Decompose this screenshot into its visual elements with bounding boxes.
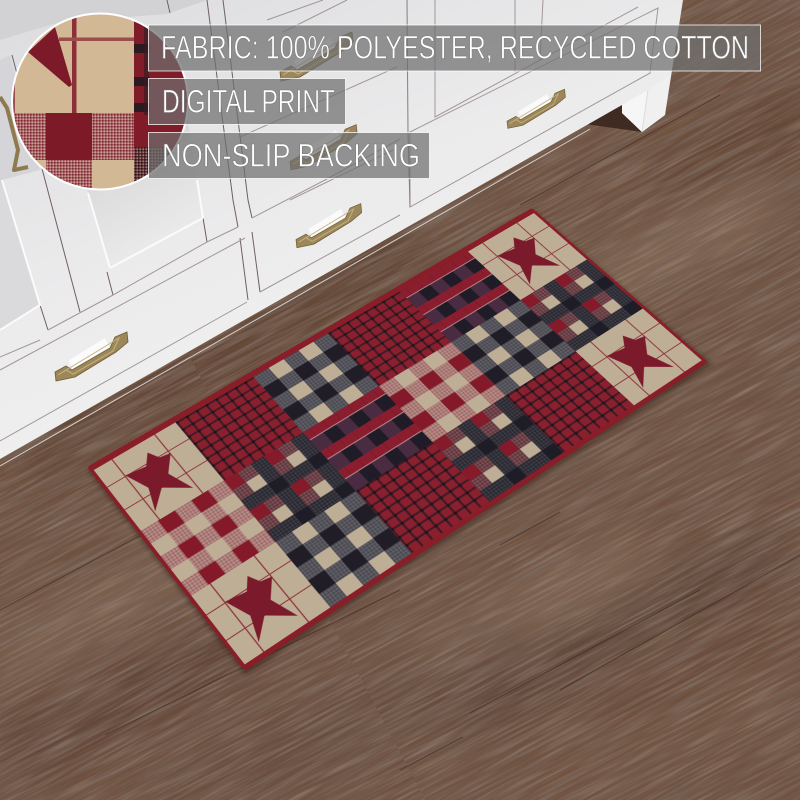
navy plaid block [432, 396, 563, 502]
label: digital print [148, 78, 346, 124]
drawer and door handles [0, 32, 565, 381]
cabinet gap lines [0, 0, 658, 466]
patchwork blocks [94, 213, 702, 664]
red check block [506, 351, 634, 452]
stripe block [400, 251, 520, 342]
navy gingham block [253, 333, 379, 432]
red check block [356, 442, 489, 553]
inset star point [28, 27, 72, 87]
red gingham block [379, 342, 506, 442]
label: non-slip backing: NON-SLIP BACKING [162, 138, 420, 174]
shadow under cabinet toe-kick [585, 105, 642, 132]
navy gingham block [276, 491, 412, 607]
inset grid lines [72, 13, 76, 113]
inset right plaid band [134, 13, 188, 147]
star block: right end top [468, 213, 587, 300]
white cabinet [0, 0, 683, 466]
star block: left end bottom [191, 542, 330, 664]
fabric close-up inset circle [12, 13, 188, 190]
navy plaid block [520, 260, 643, 351]
red gingham: left end [141, 480, 276, 596]
red binding [87, 208, 708, 671]
label: digital print: DIGITAL PRINT [162, 84, 335, 120]
rug in perspective [88, 208, 707, 670]
star block: right end bottom [576, 309, 702, 405]
red check block [328, 291, 451, 386]
inset gingham squares [12, 113, 134, 190]
navy plaid block [224, 432, 356, 542]
rug shadow on floor [87, 210, 712, 675]
navy gingham block [451, 300, 576, 396]
label: non-slip backing [148, 132, 430, 178]
stripe block [303, 386, 432, 491]
red check block [175, 377, 303, 480]
star block: left end top [94, 422, 224, 531]
cabinet door panels [0, 0, 207, 330]
overlay: fabric inset and feature labels [11, 12, 761, 190]
cabinet leg [622, 75, 670, 132]
